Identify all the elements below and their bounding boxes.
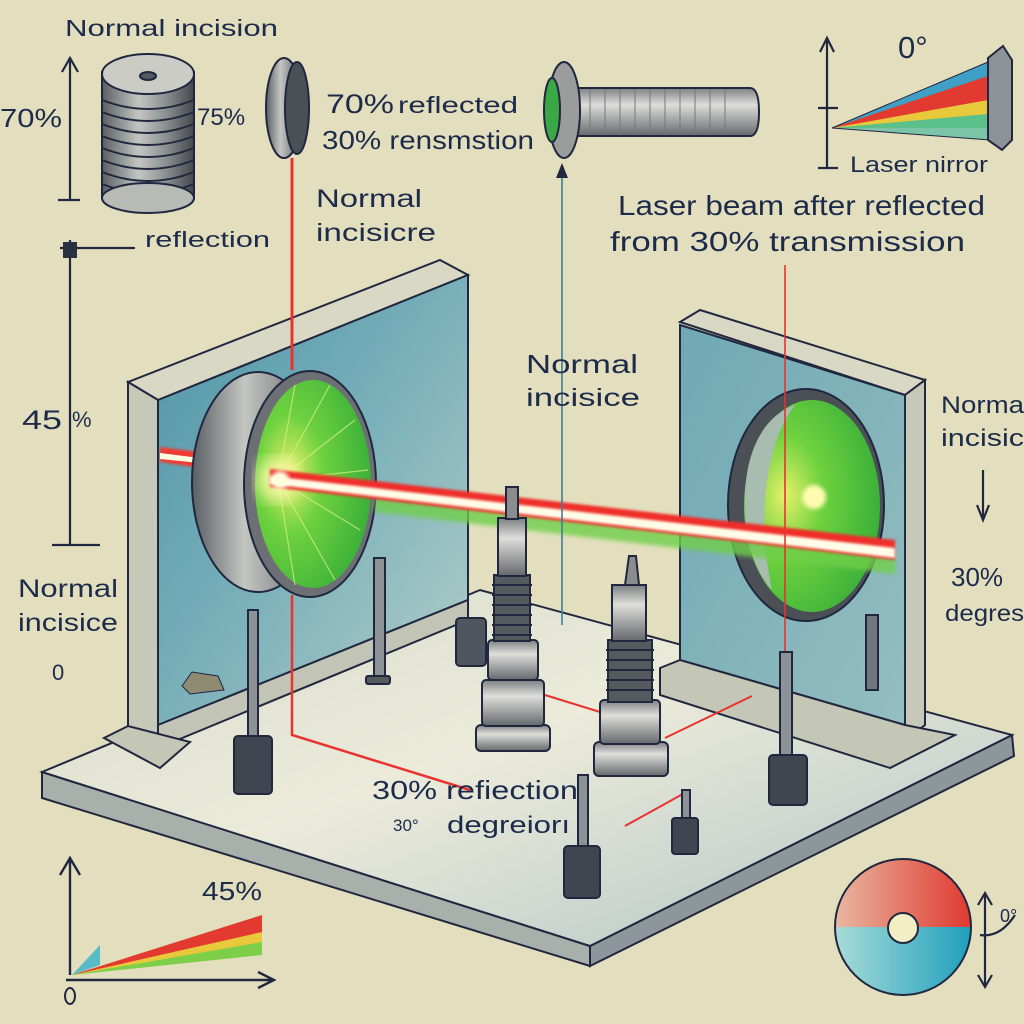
labels: Normal <box>316 185 422 213</box>
coil icon, top left <box>102 54 194 213</box>
small connector marker <box>63 242 77 258</box>
bolt cylinder, top center <box>544 62 759 158</box>
labels: Normal <box>526 349 638 379</box>
labels: 0° <box>1000 906 1017 926</box>
labels: 0 <box>52 660 64 685</box>
labels: Laser beam after reflected <box>618 190 985 221</box>
vertical red laser lines <box>292 158 785 826</box>
small lens, top <box>266 58 309 158</box>
platform <box>42 590 1014 966</box>
labels: Normal incision <box>65 15 278 41</box>
labels: 45% <box>202 876 262 906</box>
bottom-right colour disc <box>835 859 971 995</box>
panel: right mirror frame <box>660 310 955 768</box>
bottom-left chart <box>60 858 274 1004</box>
labels: incisicre <box>316 219 436 247</box>
labels: reflected <box>398 92 518 118</box>
small posts <box>234 558 878 898</box>
laser beam stub, left of lens <box>160 447 200 468</box>
rainbow fan icon, top right <box>832 46 1012 150</box>
labels: 30% <box>951 562 1003 592</box>
labels: 75% <box>197 104 245 131</box>
labels: 0° <box>898 30 928 65</box>
labels: from 30% transmission <box>610 226 965 257</box>
left lens <box>192 371 376 597</box>
labels: degres <box>945 600 1024 626</box>
labels: incisice <box>526 384 640 412</box>
labels: incisice <box>18 609 118 637</box>
labels: Laser nirror <box>850 152 988 177</box>
labels: Normal <box>18 575 118 603</box>
panel: left mirror frame <box>104 260 468 768</box>
labels: 45 <box>22 405 62 435</box>
center post assemblies <box>476 487 668 776</box>
thin upward arrow <box>556 163 568 625</box>
labels: reflection <box>145 227 270 252</box>
labels: Norma <box>941 392 1024 419</box>
labels: 30% refiection <box>372 775 578 805</box>
labels: 70% <box>0 103 62 133</box>
labels: 70% <box>326 89 394 119</box>
labels: 30% rensmstion <box>322 125 534 155</box>
labels: % <box>72 407 92 432</box>
labels: degreiorı <box>447 812 570 839</box>
laser beam <box>270 469 895 574</box>
labels: incisic <box>941 425 1024 452</box>
right lens <box>728 389 884 621</box>
labels: 30° <box>393 816 419 835</box>
